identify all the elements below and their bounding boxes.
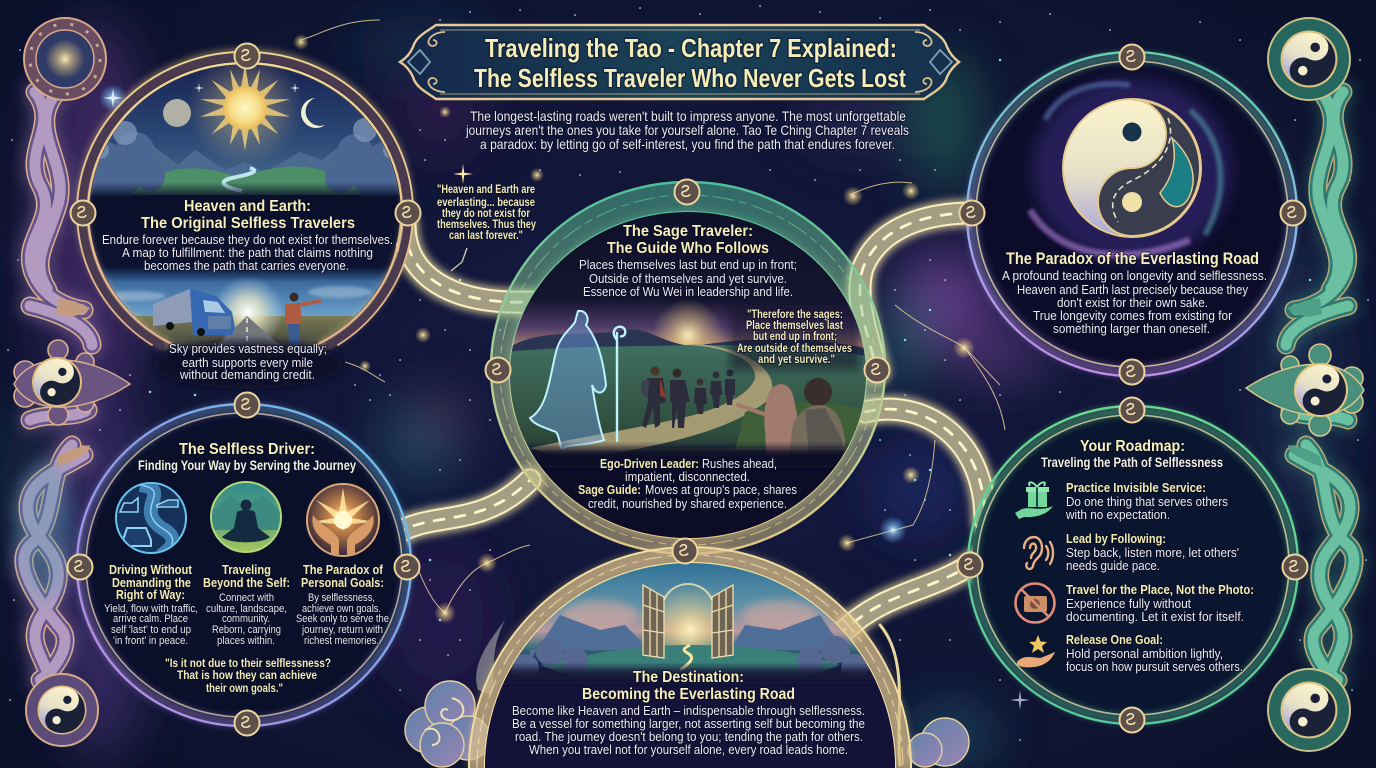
heading: Heaven and Earth: — [184, 198, 311, 215]
text: practice invisible service: Practice Invisible Service: — [1066, 480, 1206, 495]
ornate ring — [491, 182, 885, 554]
illustration: sky, sun, mountains and road — [90, 64, 400, 351]
intro text: The longest-lasting roads weren't built to impress anyone. The most unforgettable — [470, 108, 906, 124]
heading — [607, 223, 769, 257]
description: don't exist for their own sake. — [1057, 295, 1208, 310]
text: travel for the place — [1066, 582, 1254, 624]
quote: their own goals." — [206, 681, 283, 695]
quote: heaven and earth: everlasting... because — [437, 195, 535, 209]
quote: heaven and earth: "Heaven and Earth are — [437, 182, 535, 196]
description: Outside of themselves and yet survive. — [589, 271, 787, 286]
quote: That is how they can achieve — [177, 668, 317, 682]
column: paradox of personal goals: richest memories. — [304, 635, 379, 647]
heading: The Sage Traveler: — [623, 223, 753, 240]
intro text: a paradox: by letting go of self-interest, you find the path that endures forever. — [480, 136, 895, 152]
description: When you travel not for yourself alone, every road leads home. — [529, 742, 848, 757]
left middle medallion — [14, 340, 130, 425]
quote: "Therefore the sages: — [747, 307, 843, 321]
comparison text: credit, nourished by shared experience. — [588, 496, 787, 511]
text: practice invisible service: Do one thing that serves others — [1066, 494, 1228, 509]
right dragon border — [1246, 18, 1364, 751]
quote: "Is it not due to their selflessness? — [165, 656, 331, 670]
caption: Sky provides vastness equally; — [169, 341, 327, 356]
quote: heaven and earth: they do not exist for — [442, 206, 530, 220]
description — [579, 257, 797, 299]
column: driving without demanding: 'in front' in peace. — [113, 635, 188, 647]
description: Heaven and Earth last precisely because they — [1017, 282, 1248, 297]
comparison text: Moves at group's pace, shares — [645, 482, 797, 497]
illustration: yin-yang road with galaxy — [1030, 78, 1232, 262]
illustration: open gates and sunrise — [485, 560, 895, 768]
quote: and yet survive." — [758, 352, 835, 366]
column: driving without demanding: Right of Way: — [116, 587, 185, 602]
text: lead by following — [1066, 531, 1239, 573]
quote: heaven and earth — [437, 182, 536, 242]
column: paradox of personal goals: Seek only to serve the — [296, 613, 389, 625]
quote — [737, 307, 852, 366]
intro text — [465, 108, 909, 152]
illustration: guide and hikers on path — [505, 205, 875, 545]
swirling clouds — [405, 620, 969, 767]
constellations — [300, 20, 1005, 613]
heading — [1041, 438, 1223, 470]
column: paradox of personal goals: The Paradox of — [303, 562, 384, 577]
quote — [165, 656, 331, 695]
quote: Are outside of themselves — [737, 341, 852, 355]
description: becomes the path that carries everyone. — [144, 258, 349, 273]
heading: The Guide Who Follows — [607, 240, 769, 257]
description: Places themselves last but end up in front; — [579, 257, 797, 272]
text: practice invisible service — [1065, 480, 1228, 522]
heading — [582, 669, 795, 703]
title banner — [400, 25, 959, 99]
icon: hands with light — [307, 484, 379, 556]
caption: without demanding credit. — [179, 367, 315, 382]
text: release one goal: Hold personal ambition lightly, — [1066, 646, 1223, 661]
heading: The Selfless Driver: — [179, 441, 315, 458]
heading: Becoming the Everlasting Road — [582, 686, 795, 703]
column: paradox of personal goals: journey, return with — [301, 624, 383, 636]
icon: gift in hand — [1015, 482, 1053, 519]
quote: heaven and earth: themselves. Thus they — [437, 217, 536, 231]
text: release one goal: Release One Goal: — [1066, 632, 1163, 647]
right top medallion — [1268, 18, 1350, 100]
ring — [968, 406, 1298, 724]
foreground travelers — [738, 378, 848, 470]
text: release one goal — [1066, 632, 1243, 674]
column: driving without demanding: Yield, flow with traffic, — [104, 603, 198, 615]
title: The Selfless Traveler Who Never Gets Lost — [474, 63, 906, 93]
heading: The Destination: — [633, 669, 744, 686]
hikers — [641, 366, 735, 428]
column: traveling beyond the self — [203, 562, 290, 647]
column: traveling beyond the self: places within. — [217, 635, 275, 647]
column: traveling beyond the self: Beyond the Self: — [203, 575, 290, 590]
icon: man waving — [285, 292, 320, 345]
text: travel for the place: Experience fully without — [1066, 596, 1191, 611]
quote: Place themselves last — [746, 318, 843, 332]
icon: no camera — [1016, 584, 1054, 622]
text: travel for the place: Travel for the Place, Not the Photo: — [1066, 582, 1254, 597]
panel: your roadmap — [968, 406, 1298, 724]
ornate arch ring — [469, 547, 911, 768]
panel: heaven and earth — [77, 50, 413, 389]
column: paradox of personal goals: By selflessness, — [308, 592, 375, 604]
column: driving without demanding: Demanding the — [112, 575, 191, 590]
text: lead by following: needs guide pace. — [1066, 558, 1160, 573]
comparison text: Rushes ahead, — [702, 456, 777, 471]
description: Essence of Wu Wei in leadership and life. — [583, 284, 793, 299]
column: traveling beyond the self: Traveling — [222, 562, 271, 577]
icon: blue truck — [153, 289, 235, 336]
column: driving without demanding: self 'last' to end up — [111, 624, 191, 636]
left dragon border — [14, 18, 130, 746]
text: lead by following: Step back, listen more, let others' — [1066, 545, 1239, 560]
text: travel for the place: documenting. Let it exist for itself. — [1066, 609, 1244, 624]
icon: ear — [1024, 537, 1053, 569]
column: traveling beyond the self: Reborn, carrying — [212, 624, 281, 636]
panel: sage traveler — [491, 182, 885, 554]
right bottom medallion — [1268, 669, 1350, 751]
description — [102, 232, 393, 273]
left bottom medallion — [26, 674, 98, 746]
text: practice invisible service: with no expectation. — [1065, 507, 1170, 522]
caption: earth supports every mile — [182, 355, 313, 370]
comparison text: Sage Guide: — [578, 482, 641, 497]
panel: paradox of the everlasting road — [967, 52, 1297, 376]
description: something larger than oneself. — [1053, 321, 1210, 336]
left top medallion — [24, 18, 106, 100]
text: lead by following: Lead by Following: — [1066, 531, 1166, 546]
column: traveling beyond the self: community. — [222, 613, 270, 625]
column: traveling beyond the self: culture, landscape, — [206, 603, 287, 615]
column: paradox of personal goals — [296, 562, 389, 647]
description: Become like Heaven and Earth – indispensable through selflessness. — [512, 703, 865, 718]
ring — [77, 52, 413, 345]
comparison text: impatient, disconnected. — [625, 469, 750, 484]
right middle medallion — [1246, 344, 1364, 436]
glowing winding roads connecting the circles — [395, 213, 985, 765]
description — [512, 703, 865, 757]
heading: Your Roadmap: — [1080, 438, 1185, 455]
heading: Traveling the Path of Selflessness — [1041, 455, 1223, 470]
text: release one goal: focus on how pursuit serves others. — [1066, 659, 1243, 674]
description: Endure forever because they do not exist for themselves. — [102, 232, 393, 247]
description: Be a vessel for something larger, not asserting self but becoming the — [512, 716, 865, 731]
quote: but end up in front; — [753, 329, 837, 343]
glowing star nodes — [99, 34, 1030, 710]
caption — [169, 341, 327, 382]
title: Traveling the Tao - Chapter 7 Explained: — [485, 33, 897, 63]
comparison text: Ego-Driven Leader: — [600, 456, 699, 471]
gates — [643, 585, 733, 658]
description: A map to fulfillment: the path that claims nothing — [122, 245, 373, 260]
column: driving without demanding — [104, 562, 198, 647]
heading: The Paradox of the Everlasting Road — [1006, 250, 1259, 268]
heading: Finding Your Way by Serving the Journey — [138, 458, 356, 473]
panel: the destination — [405, 547, 969, 768]
icon: meditating figure — [211, 482, 282, 552]
caption haze — [153, 341, 343, 389]
panel: selfless driver — [77, 404, 411, 726]
description: road. The journey doesn't belong to you; tending the path for others. — [515, 729, 863, 744]
column: driving without demanding: arrive calm. Place — [113, 613, 188, 625]
comparison text — [578, 456, 797, 511]
description — [1002, 268, 1267, 336]
title — [474, 33, 906, 93]
ring — [77, 404, 411, 726]
heading — [141, 198, 355, 232]
heading — [138, 441, 356, 473]
column: traveling beyond the self: Connect with — [219, 592, 274, 604]
icon: winding road with cars — [116, 483, 186, 556]
ring — [967, 52, 1297, 376]
quote: heaven and earth: can last forever." — [449, 228, 523, 242]
intro text: journeys aren't the ones you take for yourself alone. Tao Te Ching Chapter 7 reveals — [465, 122, 909, 138]
description: A profound teaching on longevity and selflessness. — [1002, 268, 1267, 283]
description: True longevity comes from existing for — [1033, 308, 1233, 323]
column: driving without demanding: Driving Without — [109, 562, 193, 577]
column: paradox of personal goals: Personal Goals: — [301, 575, 384, 590]
heading: The Original Selfless Travelers — [141, 215, 355, 232]
icon: star over hand — [1017, 635, 1055, 667]
ghostly sage figure — [530, 311, 625, 448]
banner frame — [400, 25, 959, 99]
column: paradox of personal goals: achieve own goals. — [302, 603, 381, 615]
